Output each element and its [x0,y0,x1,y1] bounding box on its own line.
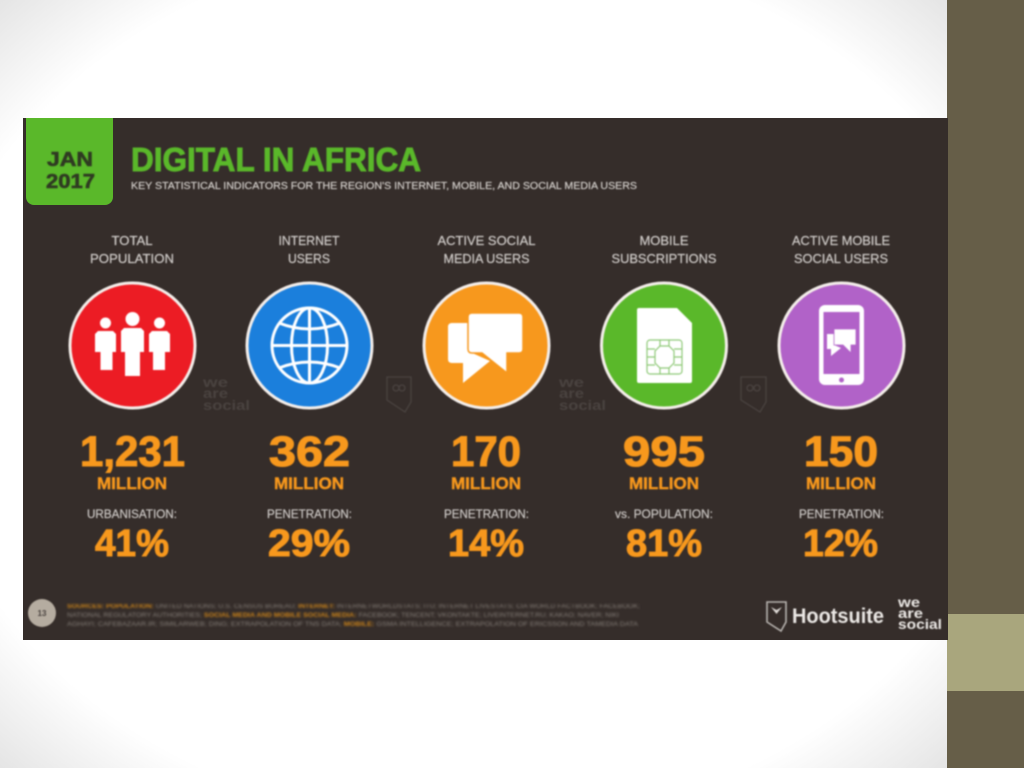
heading: ACTIVE SOCIAL [438,233,536,248]
sources text [67,604,640,628]
we are social logo: we [897,594,920,610]
watermark: we are social right [558,374,606,413]
percentage: 81% [626,523,702,565]
watermark: we are social left: we [202,374,228,390]
page number badge [28,599,56,627]
heading [792,233,890,266]
heading [278,233,340,266]
heading: USERS [288,251,330,266]
unit: MILLION [274,474,344,493]
heading [612,233,717,266]
sources text: AGHAYI; CAFEBAZAAR.IR; SIMILARWEB; DING; EXTRAPOLATION OF TNS DATA; MOBILE: GSMA INTELLIGENCE; EXTRAPOLATION OF ERICSSON AND TAMEDIA DATA [67,622,638,628]
percentage: 41% [95,523,169,565]
watermark: owl shield left [387,377,411,412]
column: active mobile social users [779,233,904,565]
heading: INTERNET [278,233,340,248]
icon: globe [247,283,372,408]
sources text: NATIONAL REGULATORY AUTHORITIES; SOCIAL MEDIA AND MOBILE SOCIAL MEDIA: FACEBOOK; TENCENT; VKONTAKTE; LIVEINTERNET.RU; KAKAO; NAVER; NIKI [67,613,619,619]
watermark: we are social left [202,374,250,413]
icon: phone [779,283,904,408]
unit: MILLION [806,474,876,493]
heading [438,233,536,266]
heading: SOCIAL USERS [794,251,888,266]
icon: people [70,283,195,408]
watermark: we are social right: social [559,397,606,413]
heading: POPULATION [90,251,174,266]
we are social logo: are [898,605,923,621]
column: active social media users [424,233,549,565]
percentage: 12% [803,523,878,565]
date tab: JAN [47,149,93,171]
value: 150 [804,428,878,476]
slide side band [947,0,1024,768]
we are social logo [897,594,942,632]
sources text: SOURCES: POPULATION: UNITED NATIONS; U.S. CENSUS BUREAU; INTERNET: INTERNETWORLDSTATS; ITU; INTERNET LIVESTATS; CIA WORLD FACTBOOK; FACEBOOK; [67,604,640,610]
heading [90,233,174,266]
value: 362 [269,428,350,476]
date tab [26,118,113,205]
Hootsuite logo: Hootsuite [792,605,884,628]
sub label: URBANISATION: [87,507,177,521]
column: total population [70,233,195,565]
column: internet users [247,233,372,565]
heading: TOTAL [112,233,152,248]
unit: MILLION [451,474,521,493]
sub label: vs. POPULATION: [615,507,713,521]
unit: MILLION [97,474,167,493]
page number badge: 13 [38,609,47,618]
watermark: we are social left: are [203,385,228,401]
icon: speech bubbles [424,283,549,408]
column: mobile subscriptions [602,233,726,565]
watermark: we are social right: are [559,385,584,401]
watermark: we are social left: social [203,397,250,413]
heading: ACTIVE MOBILE [792,233,890,248]
sub label: PENETRATION: [799,507,884,521]
icon: SIM card [602,283,726,408]
heading: SUBSCRIPTIONS [612,251,717,266]
percentage: 14% [448,523,524,565]
subtitle: KEY STATISTICAL INDICATORS FOR THE REGION'S INTERNET, MOBILE, AND SOCIAL MEDIA USERS [131,180,637,192]
value: 170 [451,428,521,476]
title: DIGITAL IN AFRICA [131,141,421,178]
percentage: 29% [268,523,350,565]
value: 1,231 [80,428,185,476]
unit: MILLION [629,474,699,493]
we are social logo: social [898,616,942,632]
sub label: PENETRATION: [444,507,529,521]
value: 995 [623,428,705,476]
heading: MOBILE [640,233,689,248]
panel: infographic [23,118,948,640]
Hootsuite logo [767,602,884,631]
watermark: owl shield right [741,377,766,412]
watermark: we are social right: we [558,374,584,390]
date tab: 2017 [46,171,95,193]
sub label: PENETRATION: [267,507,352,521]
heading: MEDIA USERS [444,251,530,266]
